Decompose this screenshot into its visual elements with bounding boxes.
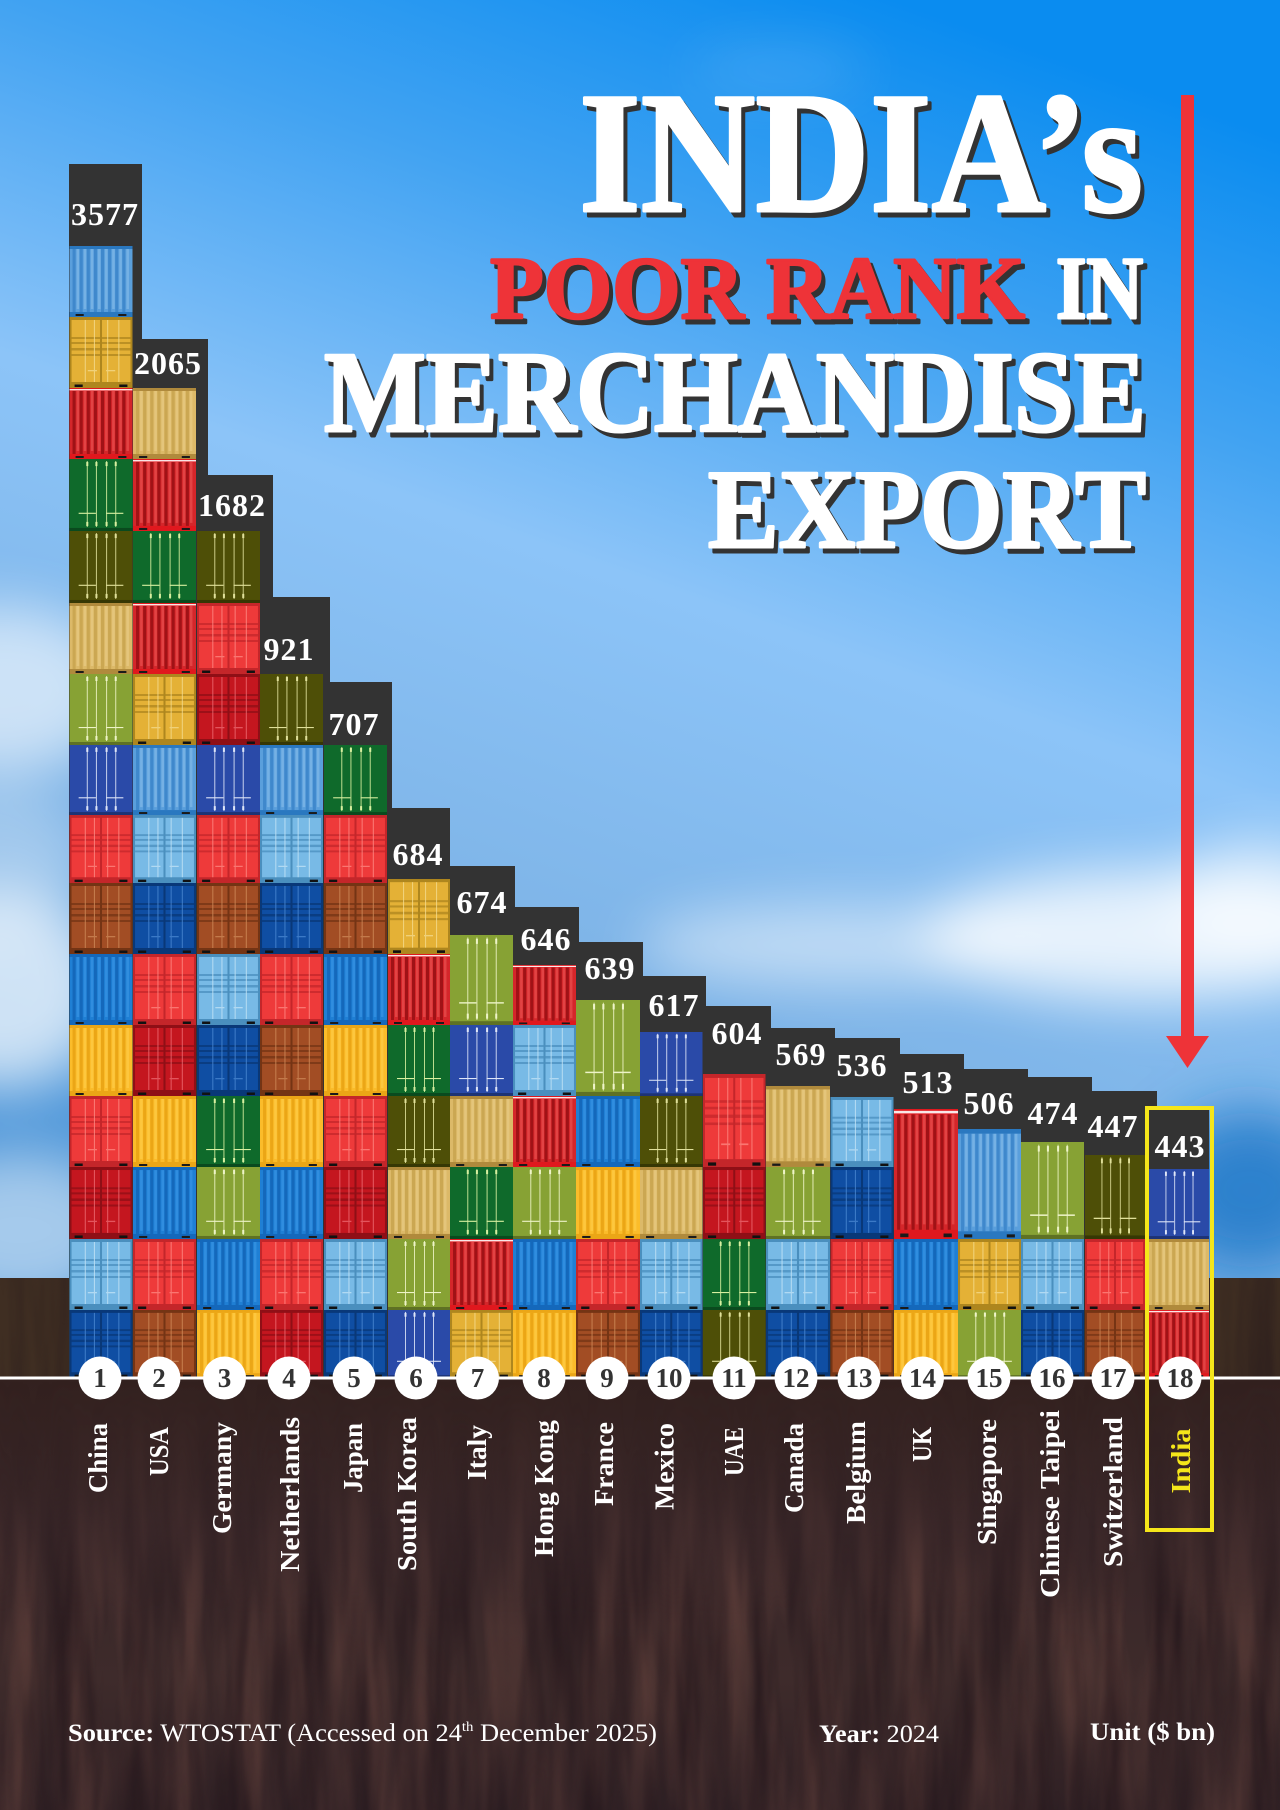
rank badges: 6 [409, 1363, 423, 1393]
column: South Korea [388, 879, 450, 1378]
value labels: 617 [648, 987, 700, 1023]
column: Germany [197, 531, 260, 1378]
value labels: 3577 [71, 196, 139, 232]
column: Japan [324, 745, 387, 1378]
column: Mexico [640, 1032, 702, 1378]
country labels: India [1166, 1428, 1196, 1494]
rank badges: 14 [909, 1363, 936, 1393]
country labels: France [589, 1422, 619, 1506]
rank badges: 4 [282, 1363, 296, 1393]
column: Switzerland [1085, 1155, 1145, 1378]
value labels: 674 [456, 884, 508, 920]
rank badges: 8 [537, 1363, 551, 1393]
value labels: 2065 [134, 345, 202, 381]
arrow pointing to India [1166, 95, 1209, 1068]
rank badges: 15 [976, 1363, 1002, 1393]
footer: source: December 2025) [473, 1720, 657, 1747]
India highlight box [1147, 1108, 1212, 1530]
country labels: Germany [207, 1421, 237, 1534]
value labels: 1682 [198, 487, 266, 523]
title [324, 58, 1146, 572]
column: USA [133, 388, 196, 1378]
country labels: Switzerland [1098, 1417, 1128, 1567]
title line: EXPORT: EXPORT [708, 448, 1146, 572]
value labels: 684 [392, 836, 444, 872]
rank badges: 2 [152, 1363, 166, 1393]
rank badges: 12 [782, 1363, 810, 1393]
country labels: Mexico [650, 1423, 680, 1510]
background: ground and wooden floor [0, 1278, 1280, 1810]
value labels: 921 [264, 631, 314, 667]
value labels: 513 [902, 1064, 954, 1100]
country labels: Singapore [972, 1419, 1002, 1545]
title line: IN: IN [1056, 240, 1143, 338]
column: Singapore [958, 1129, 1021, 1378]
value labels: 443 [1154, 1128, 1206, 1164]
value labels: 646 [520, 921, 572, 957]
footer: source: th [462, 1720, 473, 1735]
country labels: Hong Kong [529, 1419, 559, 1557]
rank badges: 11 [721, 1363, 747, 1393]
rank badges: 16 [1038, 1363, 1066, 1393]
chart: stacked containers [70, 246, 1209, 1378]
title line: INDIA's: INDIA’s [579, 58, 1143, 249]
rank badges: 3 [218, 1363, 231, 1393]
column: Canada [766, 1086, 830, 1378]
column: France [576, 1000, 640, 1378]
title line: MERCHANDISE: MERCHANDISE [324, 329, 1146, 457]
value labels: 639 [584, 950, 636, 986]
column: UAE [703, 1074, 766, 1378]
rank badges: 18 [1166, 1363, 1194, 1393]
column: Italy [450, 935, 513, 1378]
value labels: 707 [328, 706, 380, 742]
value labels: 506 [964, 1085, 1014, 1121]
chart: dark stepped backdrop [69, 164, 1157, 1378]
value labels [71, 196, 1206, 1164]
country labels [83, 1409, 1196, 1598]
rank badges: 10 [656, 1363, 682, 1393]
footer: unit: Unit ($ bn) [1090, 1719, 1215, 1746]
value labels: 569 [776, 1036, 826, 1072]
rank badges: 1 [93, 1363, 107, 1393]
country labels: Chinese Taipei [1035, 1409, 1065, 1598]
country labels: Japan [338, 1423, 368, 1493]
footer: source: Source: WTOSTAT (Accessed on 24 [68, 1720, 445, 1747]
value labels: 536 [836, 1047, 888, 1083]
column: UK [894, 1109, 958, 1378]
column: India [1149, 1110, 1209, 1378]
country labels: South Korea [392, 1416, 422, 1571]
column: Hong Kong [513, 965, 576, 1378]
column: Netherlands [260, 674, 323, 1378]
value labels: 604 [712, 1015, 762, 1051]
background: sky [0, 0, 1280, 1310]
rank badges: 9 [600, 1363, 614, 1393]
footer: year: Year: 2024 [819, 1721, 940, 1748]
country labels: Italy [462, 1424, 492, 1480]
country labels: Netherlands [275, 1417, 305, 1572]
column: Chinese Taipei [1021, 1142, 1084, 1378]
title line: POOR RANK: POOR RANK [490, 240, 1025, 338]
country labels: UK [907, 1427, 937, 1462]
rank badges: 13 [846, 1363, 872, 1393]
rank badges: 17 [1100, 1363, 1126, 1393]
rank badges [78, 1356, 1202, 1400]
column: China [70, 246, 132, 1378]
country labels: China [83, 1423, 113, 1493]
rank badges: 7 [471, 1363, 484, 1393]
baseline [0, 1376, 1280, 1380]
rank badges: 5 [347, 1363, 361, 1393]
country labels: USA [144, 1427, 174, 1476]
column: Belgium [830, 1097, 894, 1378]
country labels: UAE [719, 1427, 749, 1476]
value labels: 474 [1028, 1095, 1078, 1131]
value labels: 447 [1088, 1108, 1138, 1144]
country labels: Belgium [841, 1420, 871, 1524]
country labels: Canada [779, 1423, 809, 1513]
